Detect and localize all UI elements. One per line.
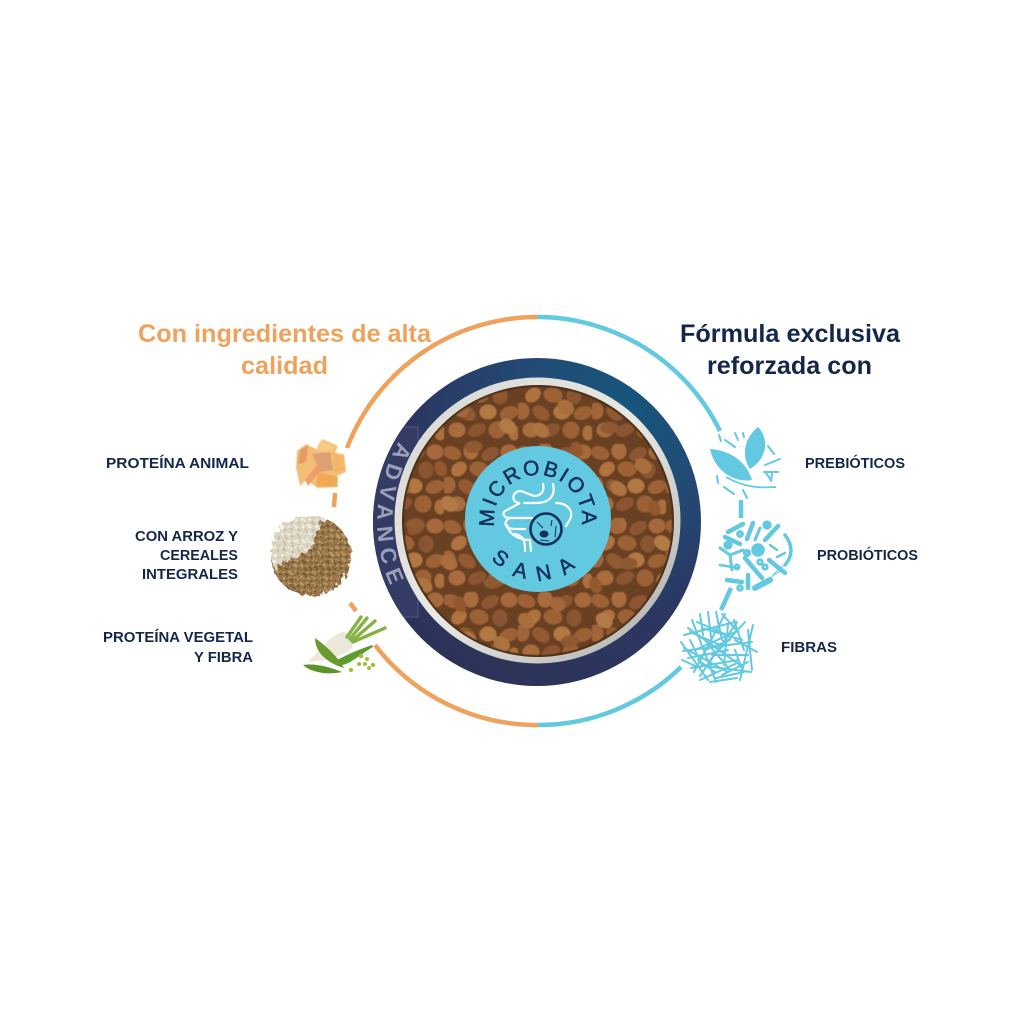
heading: ingredients <box>138 320 432 380</box>
steel rim <box>394 378 680 664</box>
heading: formula <box>680 320 901 380</box>
kibble <box>404 387 672 655</box>
icon: microbe <box>530 514 562 544</box>
heading: ingredients: Con ingredientes de alta <box>138 320 432 348</box>
bowl brand panel: ADVANCE <box>377 442 410 585</box>
icon: intestine <box>503 484 571 551</box>
food bowl <box>373 358 701 686</box>
orange arc <box>334 317 538 725</box>
badge text top: MICROBIOTA <box>479 460 597 526</box>
heading: formula: reforzada con <box>707 352 872 380</box>
icon: chicken pieces <box>296 439 346 488</box>
icon: rice and cereal <box>271 516 351 596</box>
label: arroz y cereales: CON ARROZ Y <box>135 529 238 545</box>
label: proteina animal: PROTEÍNA ANIMAL <box>106 455 249 472</box>
badge: microbiota sana <box>465 446 611 592</box>
label: proteina vegetal: PROTEÍNA VEGETAL <box>103 629 253 646</box>
pods <box>315 638 344 668</box>
peas <box>349 654 375 672</box>
label: probioticos: PROBIÓTICOS <box>817 546 918 564</box>
icon: fibres <box>681 612 757 682</box>
bowl outer ring <box>373 358 701 686</box>
heading: formula: Fórmula exclusiva <box>680 320 901 348</box>
label: arroz y cereales <box>135 529 238 583</box>
blue arc <box>538 317 741 725</box>
label: proteina vegetal <box>103 629 254 666</box>
label: prebioticos: PREBIÓTICOS <box>805 454 905 472</box>
label: fibras: FIBRAS <box>781 640 837 656</box>
heading: ingredients: calidad <box>241 352 328 380</box>
label: proteina vegetal: Y FIBRA <box>194 650 254 666</box>
badge text bottom: SANA <box>493 550 576 582</box>
icon: leaves <box>710 427 780 498</box>
icon: probiotics <box>720 523 791 590</box>
stems <box>347 617 385 642</box>
label: arroz y cereales: INTEGRALES <box>142 567 238 583</box>
infographic canvas <box>104 314 918 728</box>
label: arroz y cereales: CEREALES <box>160 548 238 564</box>
icon: turnip and peas <box>303 617 385 673</box>
turnip <box>307 632 353 662</box>
